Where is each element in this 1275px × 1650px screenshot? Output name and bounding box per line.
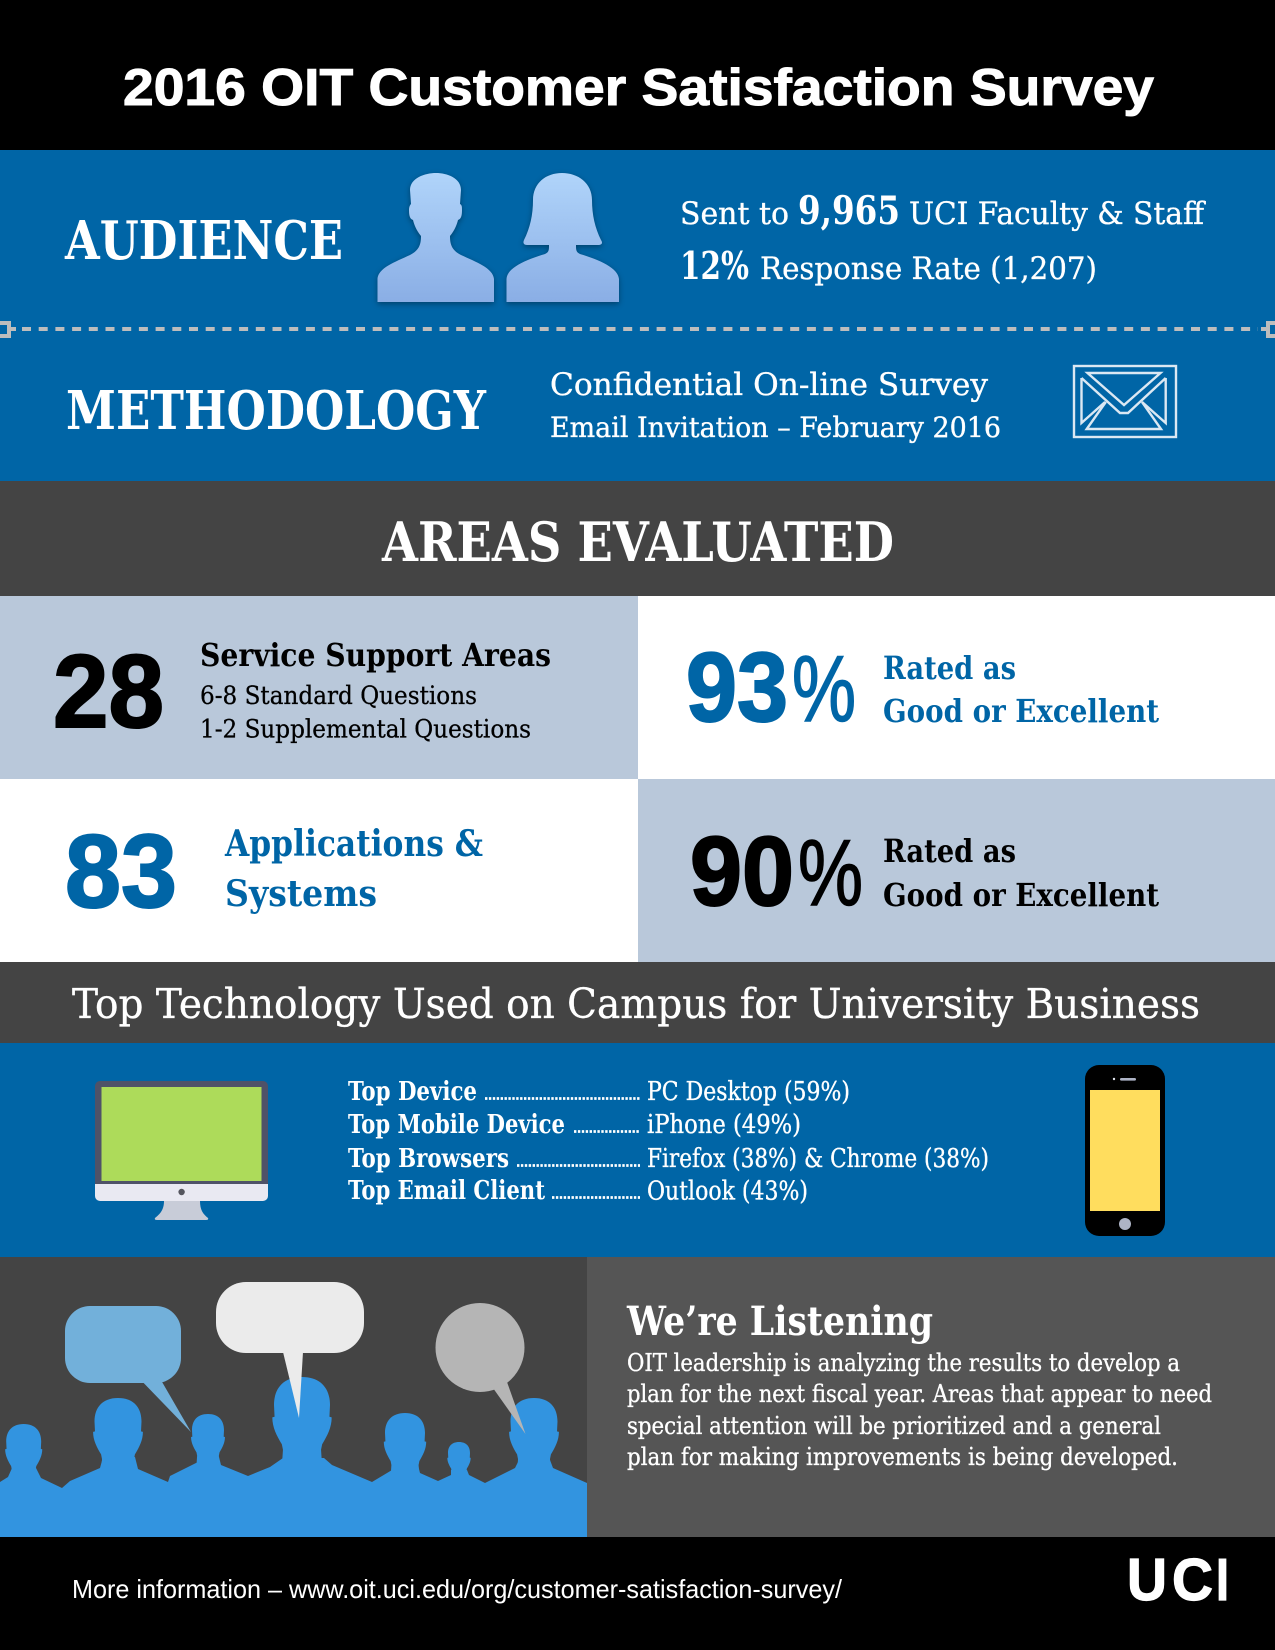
text: audience reach: 12% (680, 243, 749, 288)
panel: audience and methodology (0, 150, 1275, 481)
text: audience reach: 9,965 (798, 188, 900, 234)
panel: service rating: Good or Excellent (883, 692, 1159, 730)
icon: blue speech bubble (65, 1306, 191, 1432)
icon: white speech bubble (216, 1282, 364, 1418)
panel: service support count: 1-2 Supplemental Questions (200, 714, 531, 744)
panel: applications count: Systems (225, 873, 377, 915)
title banner (0, 0, 1275, 150)
panel: we're listening: We’re Listening (626, 1298, 933, 1345)
panel: technology list (0, 1043, 1275, 1257)
panel: applications count: Applications & (224, 823, 483, 865)
text: audience reach: Sent to (680, 196, 789, 232)
text: listening paragraph: OIT leadership is analyzing the results to develop a (627, 1349, 1180, 1377)
panel: applications count: 83 (65, 814, 177, 930)
text: listening paragraph: plan for making improvements is being developed. (627, 1443, 1178, 1471)
panel: service rating: % (792, 636, 856, 741)
title banner: 2016 OIT Customer Satisfaction Survey (123, 59, 1154, 117)
icon: desktop monitor (95, 1081, 268, 1220)
panel: audience illustration (0, 1257, 587, 1537)
illustration: crowd silhouettes (0, 1377, 587, 1537)
panel: applications count (0, 779, 638, 962)
list: technology values: PC Desktop (59%) (647, 1077, 850, 1107)
text: listening paragraph: special attention will be prioritized and a general (627, 1412, 1161, 1440)
heading: top technology (0, 962, 1275, 1043)
heading: top technology: Top Technology Used on Campus for University Business (72, 980, 1200, 1028)
panel: service rating: 93 (686, 632, 788, 742)
icon: audience people (378, 173, 619, 302)
text: listening paragraph (627, 1349, 1212, 1471)
panel: service rating (638, 596, 1275, 779)
footer: More information – www.oit.uci.edu/org/customer-satisfaction-survey/ (72, 1574, 843, 1604)
heading: areas evaluated: AREAS EVALUATED (381, 510, 894, 574)
logo: UCI (1127, 1547, 1229, 1613)
list: technology labels: Top Browsers (348, 1144, 509, 1174)
panel: applications rating: Rated as (883, 832, 1016, 870)
footer (0, 1537, 1275, 1650)
list: technology values: Firefox (38%) & Chrome (38%) (647, 1144, 989, 1174)
list: technology labels (348, 1077, 565, 1206)
icon: smartphone (1085, 1065, 1165, 1236)
logo: UCI: U (1127, 1547, 1167, 1613)
logo: UCI: C (1172, 1547, 1213, 1613)
list: technology labels: Top Email Client (348, 1176, 545, 1206)
panel: applications rating: Good or Excellent (883, 876, 1159, 914)
panel: service rating: Rated as (883, 649, 1016, 687)
text: audience reach: Response Rate (1,207) (760, 251, 1097, 287)
panel: service support count: Service Support Areas (200, 636, 551, 674)
text: audience reach: UCI Faculty & Staff (909, 196, 1206, 232)
list: technology labels: Top Device (348, 1077, 477, 1107)
panel: applications rating (638, 779, 1275, 962)
panel: applications rating: 90 (690, 816, 794, 926)
heading: audience: AUDIENCE (64, 210, 343, 272)
heading: methodology: METHODOLOGY (66, 380, 487, 442)
text: methodology details: Email Invitation – February 2016 (550, 411, 1001, 444)
divider: dashed cut line (0, 323, 1275, 336)
icon: grey speech bubble (436, 1303, 526, 1434)
text: methodology details (550, 367, 1001, 444)
list: technology values: Outlook (43%) (647, 1176, 808, 1206)
list: technology labels: Top Mobile Device (348, 1110, 565, 1140)
text: methodology details: Confidential On-line Survey (550, 367, 988, 403)
text: audience reach (680, 188, 1206, 288)
list: technology values (647, 1077, 989, 1206)
panel: service support count: 28 (53, 634, 164, 750)
panel: applications rating: % (798, 820, 863, 925)
icon: envelope (1074, 366, 1176, 437)
heading: areas evaluated (0, 481, 1275, 596)
logo: UCI: I (1216, 1547, 1229, 1613)
list: technology values: iPhone (49%) (647, 1110, 801, 1140)
text: listening paragraph: plan for the next fiscal year. Areas that appear to need (627, 1380, 1212, 1408)
panel: service support count: 6-8 Standard Questions (200, 681, 477, 710)
list: dot leaders (485, 1098, 640, 1198)
panel: we're listening (587, 1257, 1275, 1537)
panel: service support count (0, 596, 638, 779)
